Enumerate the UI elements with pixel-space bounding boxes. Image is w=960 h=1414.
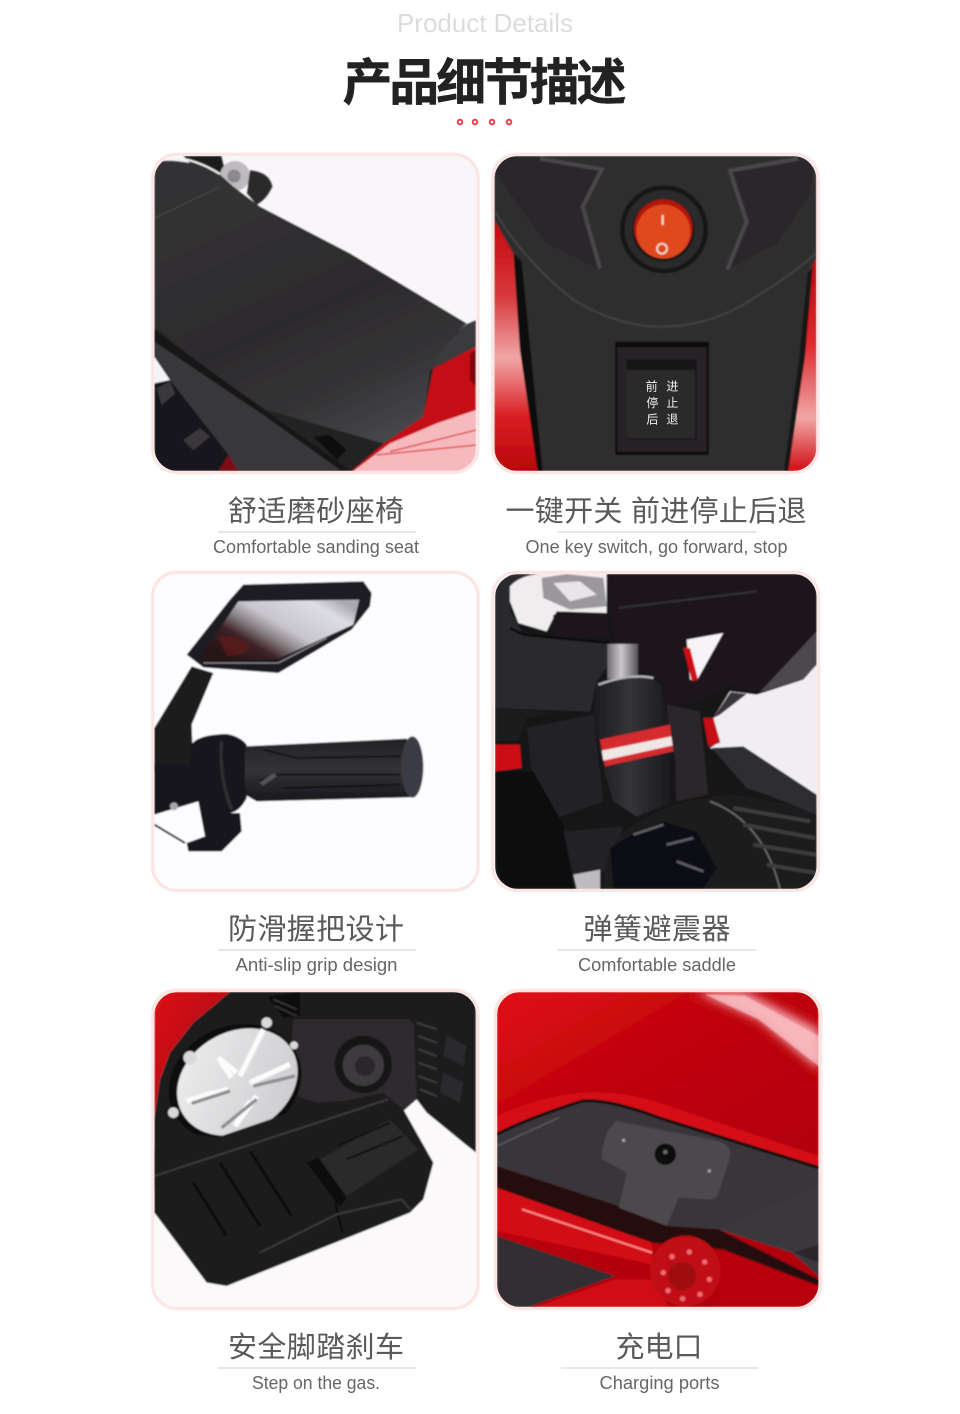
switch labels: 后 — [646, 413, 658, 427]
icon: switch console photo — [494, 156, 816, 471]
caption: charging port: Charging ports — [600, 1373, 720, 1393]
panel: comfortable seat — [153, 154, 478, 472]
caption: grip: Anti-slip grip design — [236, 955, 398, 975]
caption: shock absorber: Comfortable saddle — [578, 955, 736, 975]
panel: foot pedal — [149, 990, 478, 1308]
switch labels: 止 — [666, 396, 678, 410]
caption: seat: Comfortable sanding seat — [213, 537, 419, 557]
heading: shock absorber: 弹簧避震器 — [584, 913, 730, 946]
switch labels — [646, 378, 678, 427]
icon: charging port photo — [497, 992, 819, 1307]
switch labels: 停 — [646, 395, 658, 410]
infographic page — [151, 13, 822, 1393]
panel: anti-slip grip — [153, 572, 478, 890]
icon: seat photo — [154, 156, 476, 471]
title: 产品细节描述 — [342, 55, 626, 111]
decorative red dots — [458, 120, 511, 124]
heading: grip: 防滑握把设计 — [228, 913, 404, 946]
panel: charging port — [495, 990, 821, 1308]
panel: spring shock absorber — [493, 572, 819, 890]
switch labels: 进 — [666, 379, 678, 393]
heading: key switch: 一键开关 前进停止后退 — [506, 495, 806, 528]
panel: key switch — [493, 154, 818, 472]
heading: foot pedal: 安全脚踏刹车 — [228, 1331, 404, 1364]
icon: mirror and handlebar photo — [154, 574, 476, 889]
icon: shock absorber photo — [495, 574, 817, 889]
heading: charging port: 充电口 — [616, 1331, 702, 1364]
icon: foot pedal photo — [149, 992, 476, 1307]
caption: foot pedal: Step on the gas. — [252, 1373, 380, 1393]
switch labels: 前 — [646, 378, 658, 393]
caption: key switch: One key switch, go forward, stop — [526, 537, 788, 557]
subtitle: Product Details: Product Details — [397, 8, 573, 38]
switch labels: 退 — [666, 413, 678, 427]
heading: seat: 舒适磨砂座椅 — [228, 495, 404, 528]
